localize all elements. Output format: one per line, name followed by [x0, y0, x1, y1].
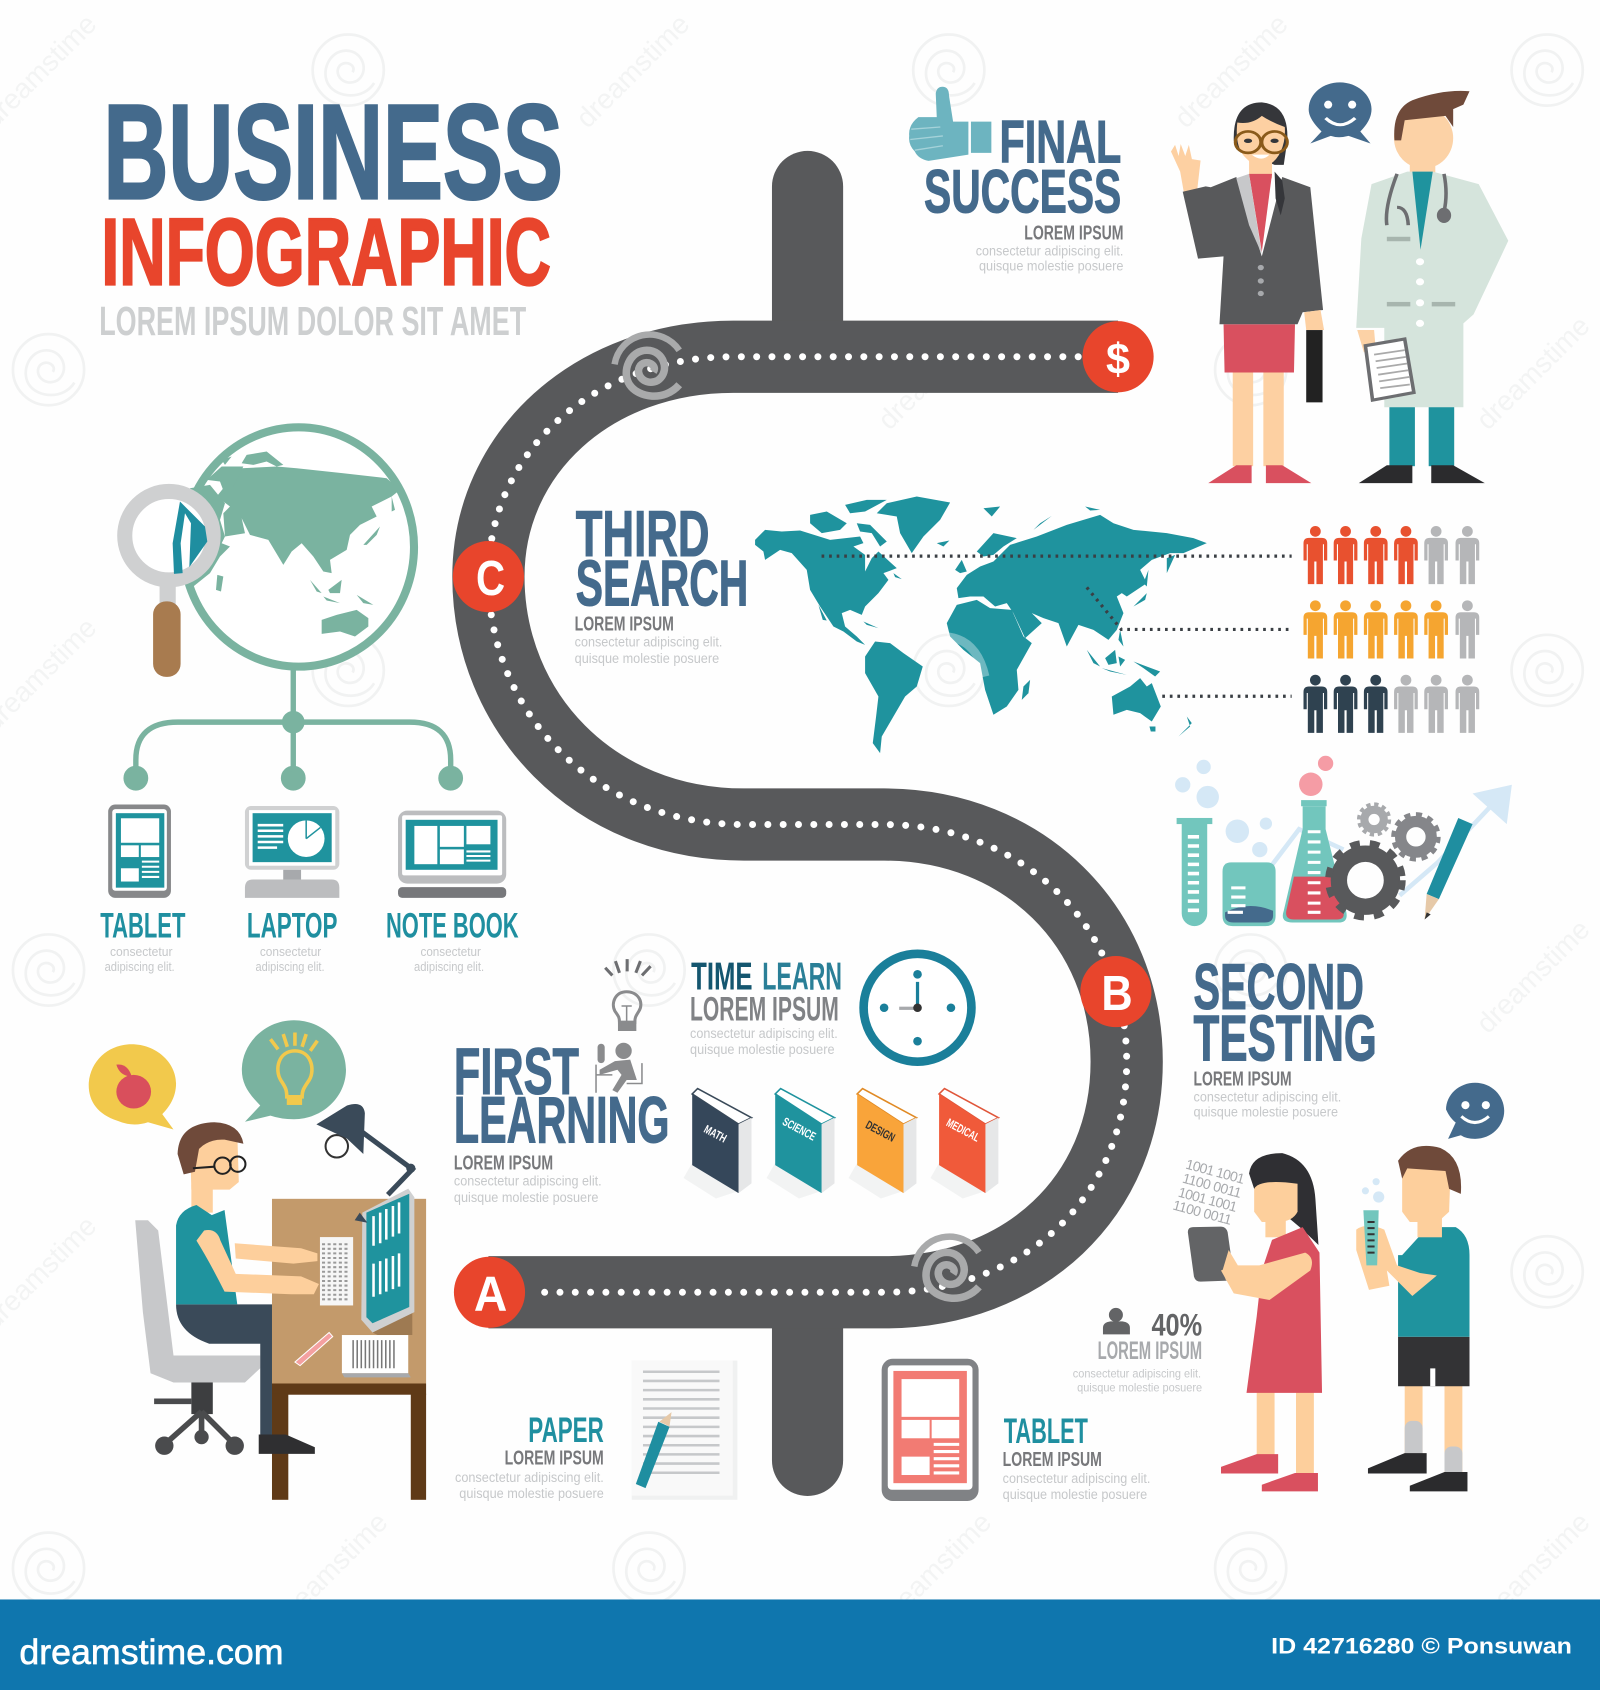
trend arrow — [1272, 800, 1497, 896]
marker: A — [454, 1257, 525, 1328]
chair — [135, 1220, 260, 1455]
text: second testing: consectetur adipiscing elit. — [1194, 1089, 1341, 1105]
book: math: MATH — [702, 1122, 729, 1145]
watermark pattern: dreamstime — [872, 310, 997, 435]
icon: smile bubble small — [1446, 1083, 1504, 1139]
dotted leader lines — [822, 556, 1292, 696]
watermark pattern: dreamstime — [1470, 1506, 1596, 1632]
marker: A: A — [474, 1266, 507, 1322]
illustration: girl with tablet — [1188, 1153, 1322, 1491]
marker: dollar: $ — [1106, 336, 1130, 384]
text: final success — [924, 108, 1124, 274]
binary text: 1100 0011 — [1181, 1170, 1244, 1201]
marker: dollar — [1082, 321, 1154, 392]
book: math — [684, 1089, 751, 1199]
pictogram row: orange — [1304, 600, 1479, 659]
icon: lightbulb speech bubble — [242, 1020, 346, 1122]
icon: apple speech bubble — [89, 1044, 176, 1129]
pictogram row: red — [1304, 526, 1479, 584]
book: science — [767, 1089, 835, 1199]
icon: thumbs up — [909, 87, 991, 161]
text: second testing: LOREM IPSUM — [1194, 1067, 1292, 1090]
text: second testing — [1194, 950, 1377, 1120]
connector tree — [126, 668, 460, 788]
desk — [272, 1199, 426, 1500]
title: infographic: INFOGRAPHIC — [101, 200, 551, 306]
keyboard — [320, 1237, 353, 1305]
illustration: boy with test tube — [1356, 1146, 1470, 1491]
binary text: 1001 1001 — [1177, 1184, 1239, 1215]
book: medical — [930, 1089, 998, 1199]
tablet monitor — [361, 1189, 414, 1335]
test tube — [1177, 818, 1212, 926]
gears — [1329, 804, 1438, 917]
text: paper: consectetur adipiscing elit. — [455, 1469, 604, 1485]
device labels: adipiscing elit. — [414, 959, 484, 974]
book: design — [849, 1089, 916, 1199]
lamp — [316, 1104, 415, 1223]
text: time learn — [690, 955, 842, 1057]
text: third search — [575, 497, 748, 666]
icon: clock — [864, 954, 971, 1062]
text: first learning — [454, 1034, 670, 1205]
illustration: science lab — [1175, 756, 1512, 926]
text: second testing: SECOND — [1194, 950, 1364, 1023]
book: medical: MEDICAL — [944, 1116, 982, 1145]
icon: magnifying glass — [125, 491, 213, 677]
device labels: consectetur — [420, 944, 481, 959]
title: business: BUSINESS — [104, 76, 563, 227]
text: time learn: LOREM IPSUM — [690, 991, 839, 1029]
text: second testing: TESTING — [1194, 1002, 1377, 1075]
binary text — [1171, 1156, 1247, 1228]
text: final success: FINAL — [999, 108, 1121, 176]
stat: 40 percent: quisque molestie posuere — [1077, 1380, 1202, 1394]
student — [176, 1122, 319, 1454]
bubbles — [1175, 756, 1333, 857]
text: final success: LOREM IPSUM — [1024, 221, 1123, 244]
watermark pattern: dreamstime — [1168, 8, 1294, 134]
text: time learn: consectetur adipiscing elit. — [690, 1025, 838, 1041]
text: first learning: quisque molestie posuere — [454, 1189, 599, 1205]
paper with barcode — [342, 1335, 411, 1377]
text: final success: SUCCESS — [924, 157, 1121, 226]
icon: sitting person — [596, 1043, 642, 1093]
text: tablet — [1003, 1411, 1150, 1502]
text: first learning: LOREM IPSUM — [454, 1151, 553, 1174]
icon: desktop monitor — [245, 806, 339, 898]
text: tablet: TABLET — [1004, 1411, 1088, 1451]
pictogram row: navy — [1304, 675, 1479, 733]
marker: C: C — [476, 550, 505, 606]
device labels: adipiscing elit. — [105, 959, 175, 974]
pencil — [1425, 818, 1473, 919]
road: s-shaped path — [488, 151, 1127, 1496]
text: paper: LOREM IPSUM — [505, 1447, 604, 1470]
icon: notebook — [398, 811, 506, 898]
footer banner: ID 42716280 © Ponsuwan — [1271, 1633, 1572, 1658]
subtitle: LOREM IPSUM DOLOR SIT AMET — [99, 298, 526, 344]
text: first learning: consectetur adipiscing elit. — [454, 1173, 602, 1189]
watermark pattern: dreamstime — [1470, 914, 1596, 1039]
book: science: SCIENCE — [780, 1114, 818, 1144]
title block — [99, 76, 563, 344]
watermark pattern: dreamstime — [1470, 310, 1596, 435]
watermark pattern: dreamstime — [872, 1506, 997, 1632]
text: second testing: quisque molestie posuere — [1194, 1104, 1338, 1120]
stat: 40 percent: 40% — [1151, 1307, 1202, 1342]
stat: 40 percent: consectetur adipiscing elit. — [1073, 1366, 1201, 1380]
text: third search: quisque molestie posuere — [575, 650, 719, 666]
flask — [1283, 800, 1347, 923]
beaker — [1223, 862, 1276, 926]
text: third search: consectetur adipiscing elit. — [575, 634, 722, 650]
icon: person small — [1103, 1308, 1130, 1334]
text: final success: quisque molestie posuere — [979, 258, 1124, 274]
stat: 40 percent — [1073, 1307, 1202, 1394]
text: third search: THIRD — [576, 497, 709, 570]
text: third search: SEARCH — [576, 547, 748, 620]
device labels — [100, 906, 519, 974]
device labels: TABLET — [100, 906, 186, 946]
icon: red tablet — [882, 1359, 979, 1501]
icon: tablet device — [108, 805, 171, 898]
device labels: LAPTOP — [247, 906, 337, 946]
illustration: businesswoman — [1171, 102, 1324, 483]
icon: idea bulb — [605, 959, 651, 1029]
marker: B: B — [1101, 965, 1133, 1021]
text: time learn: quisque molestie posuere — [690, 1041, 835, 1057]
device labels: consectetur — [110, 944, 173, 959]
text: third search: LOREM IPSUM — [575, 613, 674, 636]
device labels: adipiscing elit. — [256, 959, 325, 974]
text: tablet: quisque molestie posuere — [1003, 1486, 1147, 1502]
icon: globe — [177, 427, 414, 667]
marker: B — [1080, 956, 1151, 1027]
binary text: 1001 1001 — [1184, 1156, 1247, 1187]
text: paper: quisque molestie posuere — [459, 1485, 604, 1501]
text: first learning: LEARNING — [454, 1082, 670, 1156]
device labels: consectetur — [260, 944, 322, 959]
binary text: 1100 0011 — [1171, 1197, 1234, 1228]
text: first learning: FIRST — [454, 1034, 579, 1108]
icon: smile speech bubble — [1309, 82, 1372, 143]
illustration: student at desk — [135, 1104, 426, 1500]
footer banner: dreamstime.com — [19, 1632, 284, 1672]
text: time learn: TIME — [691, 955, 753, 998]
icon: paper and pencil — [632, 1361, 737, 1500]
book: design: DESIGN — [863, 1118, 897, 1145]
marker: C — [453, 541, 524, 612]
pencil — [295, 1332, 333, 1366]
illustration: doctor — [1356, 91, 1508, 483]
text: tablet: LOREM IPSUM — [1003, 1448, 1102, 1471]
watermark pattern: dreamstime — [570, 8, 695, 134]
world map — [755, 497, 1207, 753]
text: paper — [455, 1410, 604, 1501]
text: final success: consectetur adipiscing elit. — [976, 242, 1123, 258]
text: paper: PAPER — [528, 1410, 604, 1450]
text: time learn: LEARN — [762, 955, 842, 998]
device labels: NOTE BOOK — [386, 906, 519, 946]
footer banner — [0, 1599, 1600, 1690]
stat: 40 percent: LOREM IPSUM — [1098, 1338, 1202, 1365]
watermark pattern: dreamstime — [268, 1506, 393, 1632]
text: tablet: consectetur adipiscing elit. — [1003, 1470, 1150, 1486]
